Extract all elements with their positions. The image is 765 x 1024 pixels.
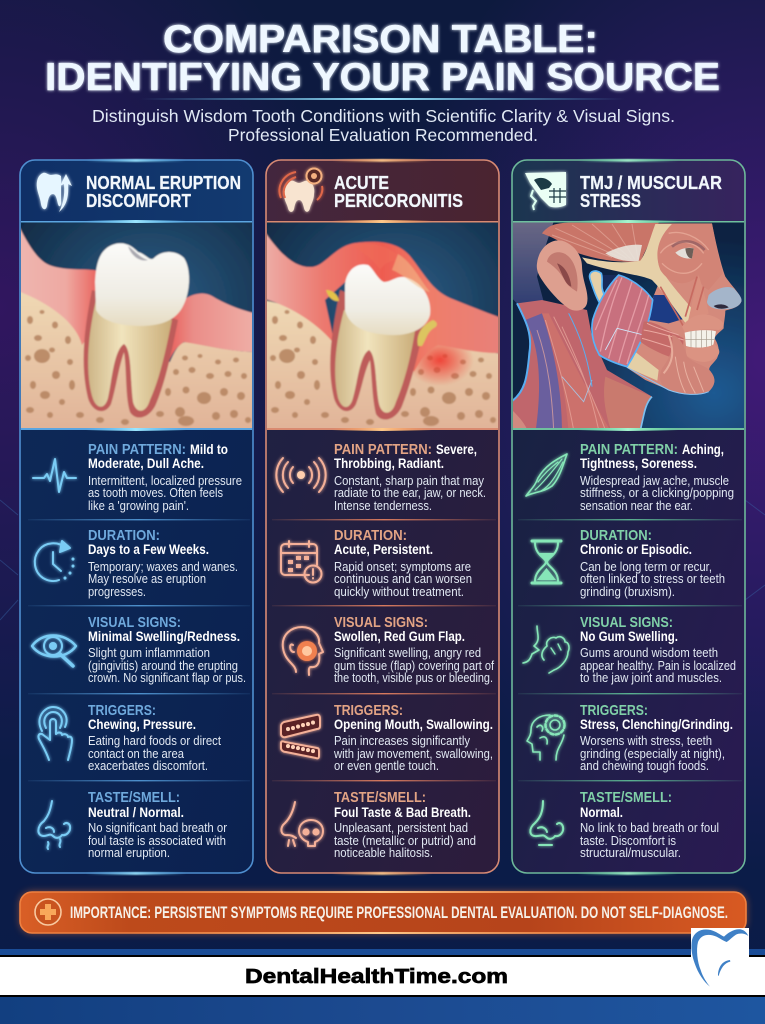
icon: nose [530,801,563,845]
callout: importance banner [20,891,746,934]
row: visual signs: Significant swelling, angry red [334,646,481,660]
row: triggers [527,703,733,773]
row: pain pattern: Constant, sharp pain that may [334,474,485,488]
subtitle [92,106,675,145]
row: taste and smell: Neutral / Normal. [88,805,184,821]
row: duration: progresses. [88,585,146,599]
row: triggers: contact on the area [88,747,184,761]
title: IDENTIFYING YOUR PAIN SOURCE [45,56,720,99]
icon: radiating pulse [276,458,326,492]
row: taste and smell: No link to bad breath or foul [580,821,719,835]
row: pain pattern: PAIN PATTERN: [334,442,432,458]
row: duration: Rapid onset; symptoms are [334,560,471,574]
icon: jaw skull [525,172,566,210]
row: duration: Temporary; waxes and wanes. [88,560,238,574]
row: visual signs [32,615,246,685]
row: pain pattern: like a 'growing pain'. [88,499,189,513]
heading: normal eruption [37,172,241,212]
row: duration [281,528,472,599]
row: visual signs: Minimal Swelling/Redness. [88,629,240,645]
row: pain pattern: Mild to [190,442,228,458]
row: pain pattern [276,442,486,513]
icon: head with brain gear [527,715,564,760]
row: taste and smell: normal eruption. [88,846,170,860]
row: triggers: and chewing tough foods. [580,759,709,773]
icon: head with swollen cheek [283,627,323,675]
row: triggers: or even gentle touch. [334,759,439,773]
row: taste and smell: Normal. [580,805,623,821]
row: triggers: exacerbates discomfort. [88,759,208,773]
heading: normal eruption: NORMAL ERUPTION [86,172,241,193]
title [45,18,720,99]
row: triggers: Worsens with stress, teeth [580,734,712,748]
row: visual signs: Swollen, Red Gum Flap. [334,629,465,645]
row: taste and smell: taste. Discomfort is [580,834,676,848]
row: visual signs: gum tissue (flap) covering part of [334,659,494,673]
row: triggers: TRIGGERS: [580,703,648,719]
row: taste and smell [38,790,227,860]
subtitle: Distinguish Wisdom Tooth Conditions with Scientific Clarity & Visual Signs. [92,106,675,126]
heading: TMJ muscular stress: STRESS [580,190,641,211]
row: pain pattern [33,442,242,513]
row: triggers: Pain increases significantly [334,734,471,748]
row: visual signs: VISUAL SIGNS: [580,615,673,631]
icon: eye with magnifier [32,636,76,666]
row: pain pattern: Intense tenderness. [334,499,432,513]
row: duration: DURATION: [580,528,652,544]
row: visual signs: VISUAL SIGNS: [88,615,181,631]
row: duration: continuous and can worsen [334,572,472,586]
icon: medical cross [35,899,61,925]
heading: TMJ muscular stress: TMJ / MUSCULAR [580,172,722,193]
row: pain pattern: PAIN PATTERN: [580,442,678,458]
row: visual signs: Gums around wisdom teeth [580,646,718,660]
row: pain pattern [526,442,734,513]
panel: normal eruption discomfort [15,159,258,875]
row: duration: Can be long term or recur, [580,560,712,574]
icon: pointing hand [38,707,72,760]
row: taste and smell [281,790,476,860]
row: duration: Acute, Persistent. [334,542,433,558]
icon: nose [38,801,70,849]
row: visual signs: No Gum Swelling. [580,629,678,645]
row: taste and smell: structural/muscular. [580,846,681,860]
row: pain pattern: Moderate, Dull Ache. [88,456,204,472]
row: pain pattern: sensation near the ear. [580,499,693,513]
icon: muscle fibres [526,454,567,496]
row: visual signs: (gingivitis) around the erupting [88,659,238,673]
panel: acute pericoronitis [261,159,504,875]
row: taste and smell: Foul Taste & Bad Breath. [334,805,471,821]
row: duration: DURATION: [334,528,407,544]
row: pain pattern: Aching, [682,442,724,458]
row: taste and smell: TASTE/SMELL: [88,790,180,806]
row: duration: DURATION: [88,528,160,544]
footer stripes [0,949,765,1024]
row: taste and smell: TASTE/SMELL: [580,790,672,806]
row: visual signs: the tooth, visible pus or bleeding. [334,671,493,685]
website name: DentalHealthTime.com [245,965,508,988]
row: taste and smell: Unpleasant, persistent bad [334,821,468,835]
heading: acute pericoronitis: ACUTE [334,172,389,193]
row: visual signs: appear healthy. Pain is localized [580,659,736,673]
panel: TMJ muscular stress [509,159,750,875]
illustration: jaw and neck muscles [513,222,744,428]
icon: tooth with arrow [37,173,72,212]
row: triggers: TRIGGERS: [88,703,156,719]
title: COMPARISON TABLE: [163,18,598,61]
row: triggers: Chewing, Pressure. [88,717,196,733]
row: triggers: Eating hard foods or direct [88,734,221,748]
row: pain pattern: radiate to the ear, jaw, or neck. [334,486,486,500]
row: visual signs [523,615,736,685]
row: taste and smell: noticeable halitosis. [334,846,433,860]
row: duration: Chronic or Episodic. [580,542,692,558]
row: duration: Days to a Few Weeks. [88,542,209,558]
row: triggers: with jaw movement, swallowing, [333,747,493,761]
illustration: inflamed gum flap over tooth [267,222,498,428]
row: visual signs: Slight gum inflammation [88,646,210,660]
heading: acute pericoronitis [279,168,463,212]
row: taste and smell: TASTE/SMELL: [334,790,426,806]
row: pain pattern: Throbbing, Radiant. [334,456,444,472]
row: taste and smell [530,790,719,860]
row: duration [532,528,725,599]
row: triggers: Stress, Clenching/Grinding. [580,717,733,733]
row: taste and smell: taste (metallic or putrid) and [334,834,476,848]
row: duration: May resolve as eruption [88,572,206,586]
row: pain pattern: PAIN PATTERN: [88,442,186,458]
row: duration [35,528,238,599]
row: triggers [38,703,221,773]
icon: open dentures [281,715,320,758]
row: pain pattern: Severe, [436,442,477,458]
row: visual signs: VISUAL SIGNS: [334,615,428,631]
row: visual signs: crown. No significant flap or pus. [88,671,246,685]
subtitle: Professional Evaluation Recommended. [228,125,538,145]
heading: acute pericoronitis: PERICORONITIS [334,190,463,211]
row: taste and smell: foul taste is associated with [88,834,226,848]
row: visual signs [283,615,494,685]
icon: clenched fist and jaw [523,626,569,673]
row: taste and smell: No significant bad breath or [88,821,227,835]
illustration: erupting tooth [21,222,252,428]
icon: heartbeat line [33,459,76,492]
row: pain pattern: stiffness, or a clicking/popping [580,486,734,500]
row: triggers: Opening Mouth, Swallowing. [334,717,493,733]
icon: clock [35,541,73,581]
logo: tooth outline [691,928,749,987]
row: duration: quickly without treatment. [334,585,464,599]
icon: hourglass [532,541,561,583]
row: triggers: grinding (especially at night), [580,747,725,761]
row: pain pattern: Intermittent, localized pressure [88,474,242,488]
row: duration: often linked to stress or teeth [580,572,725,586]
row: triggers: TRIGGERS: [334,703,403,719]
heading: TMJ muscular stress [525,172,722,211]
row: visual signs: to the jaw joint and muscles. [580,671,722,685]
row: triggers [281,703,493,773]
icon: tooth with pain signal [279,168,322,212]
heading: normal eruption: DISCOMFORT [86,190,192,211]
row: duration: grinding (bruxism). [580,585,675,599]
icon: nose and skull [281,802,323,846]
icon: calendar with alert [281,541,322,582]
row: pain pattern: Tightness, Soreness. [580,456,697,472]
row: pain pattern: as tooth moves. Often feels [88,486,223,500]
row: pain pattern: Widespread jaw ache, muscle [580,474,729,488]
